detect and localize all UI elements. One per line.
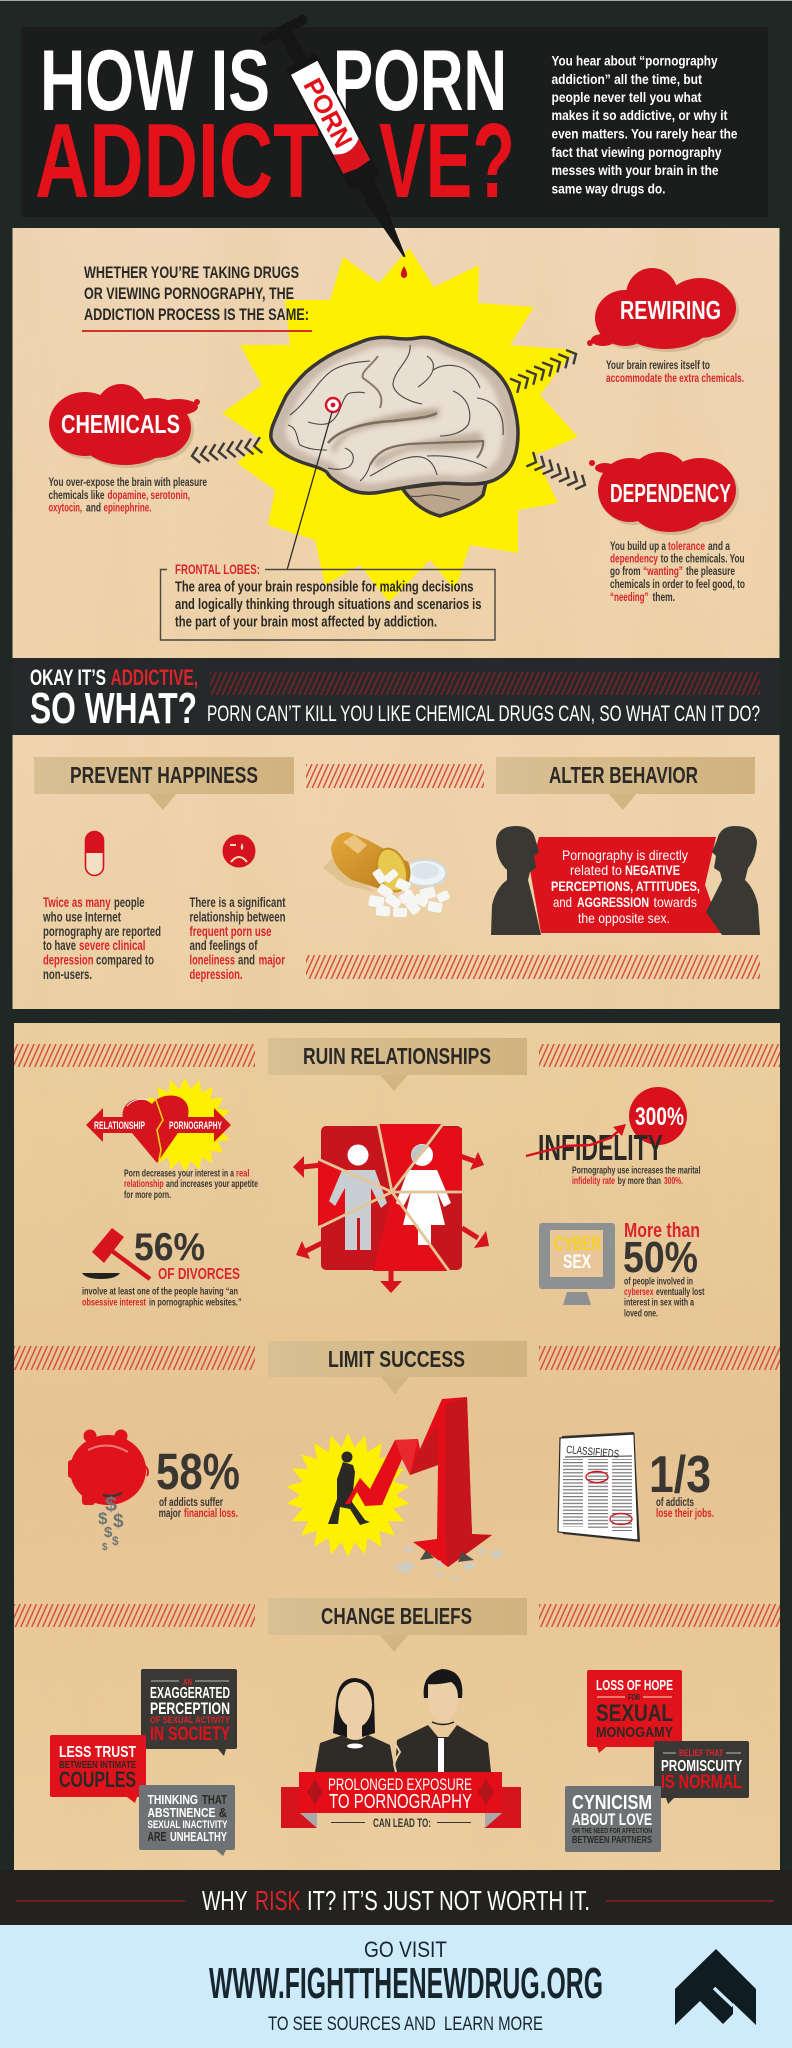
callout: frontal lobes — [160, 561, 495, 640]
dollar signs: $ — [112, 1534, 119, 1548]
text: loneliness stat — [190, 895, 286, 982]
heading: change beliefs — [268, 1598, 527, 1652]
heading: prevent happiness — [34, 757, 294, 810]
intro text: even matters. You rarely hear the — [552, 126, 738, 142]
ribbon: prolonged exposure: PROLONGED EXPOSURE — [328, 1775, 472, 1794]
blood drop — [401, 266, 407, 278]
stat: infidelity: INFIDELITY — [538, 1127, 663, 1168]
dollar signs — [98, 1494, 124, 1553]
banner text: NEGATIVE — [625, 862, 680, 878]
man — [395, 1669, 491, 1772]
target marker — [326, 398, 340, 412]
icon: piggy bank — [68, 1430, 148, 1553]
stat: infidelity — [526, 1087, 701, 1187]
bubble: abstinence unhealthy: SEXUAL INACTIVITY — [148, 1819, 228, 1831]
stat: 56 percent — [82, 1226, 242, 1308]
bubble: loss of hope: MONOGAMY — [596, 1724, 673, 1741]
dependency text: tolerance — [668, 541, 705, 553]
text: real relationship: real — [236, 1168, 250, 1180]
icon: monitor: SEX — [563, 1252, 591, 1273]
intro text: makes it so addictive, or why it — [552, 107, 728, 123]
dependency text: to the chemicals. You — [661, 554, 745, 566]
chemicals text: chemicals like — [48, 490, 104, 502]
heading: change beliefs: CHANGE BELIEFS — [321, 1603, 472, 1629]
heading: alter behavior: ALTER BEHAVIOR — [549, 762, 698, 788]
stat: 56 percent: involve at least one of the people having “an — [82, 1286, 238, 1298]
yellow burst — [222, 248, 578, 602]
cloud: rewiring: REWIRING — [620, 295, 721, 325]
heading: same process: ADDICTION PROCESS IS THE SAME: — [84, 305, 309, 324]
text: depression stat: people — [114, 895, 145, 910]
bubble: loss of hope: SEXUAL — [596, 1700, 673, 1727]
bubble: loss of hope — [587, 1670, 682, 1753]
icon: monitor — [539, 1223, 615, 1305]
bubble: abstinence unhealthy: THAT — [202, 1792, 227, 1807]
text: loneliness stat: relationship between — [190, 910, 286, 924]
callout: frontal lobes: and logically thinking through situations and scenarios is — [175, 597, 482, 613]
go visit: GO VISIT — [364, 1937, 447, 1962]
graphic: falling chart and businessman — [280, 1397, 504, 1581]
ribbon: prolonged exposure — [281, 1772, 521, 1830]
arrow: to rewiring — [510, 347, 580, 393]
callout: frontal lobes: FRONTAL LOBES: — [175, 561, 260, 577]
stat: cybersex: of people involved in — [624, 1276, 693, 1288]
banner text: AGGRESSION — [577, 894, 649, 910]
stat: cybersex — [623, 1220, 705, 1320]
stat: 56 percent: OF DIVORCES — [158, 1266, 240, 1283]
text: depression stat: depression — [43, 952, 94, 968]
callout: frontal lobes: The area of your brain responsible for making decisions — [175, 580, 474, 596]
figure: woman — [396, 1144, 451, 1245]
bubble: cynicism: CYNICISM — [572, 1792, 652, 1814]
panel: relationships, success, beliefs — [14, 1023, 780, 1870]
heading: same process: OR VIEWING PORNOGRAPHY, THE — [84, 284, 294, 303]
rubble — [394, 1546, 504, 1581]
dependency text: go from — [610, 566, 640, 578]
heading: alter behavior — [496, 757, 755, 810]
stat: cybersex: cybersex — [624, 1286, 654, 1298]
icon: heart and arrows: RELATIONSHIP — [94, 1120, 145, 1132]
brain illustration — [271, 337, 518, 516]
bubble: loss of hope: LOSS OF HOPE — [596, 1678, 673, 1694]
bubble: cynicism: ABOUT LOVE — [572, 1810, 652, 1829]
cloud: chemicals: CHEMICALS — [61, 409, 180, 439]
text: depression stat: pornography are reported — [43, 924, 161, 939]
syringe label: PORN — [297, 73, 359, 153]
portraits: couple — [315, 1669, 491, 1772]
pointer line — [287, 412, 332, 570]
cloud: dependency — [589, 452, 739, 535]
dependency text: You build up a — [610, 541, 666, 553]
stat: infidelity: infidelity rate — [572, 1175, 615, 1187]
stat: one third: 1/3 — [649, 1446, 711, 1504]
bubble: exaggerated perception — [141, 1669, 237, 1756]
band heading: OKAY IT’S — [30, 665, 106, 690]
heading: ruin relationships: RUIN RELATIONSHIPS — [303, 1043, 491, 1069]
dependency text: the pleasure — [686, 566, 735, 578]
syringe — [259, 13, 428, 269]
bubble: abstinence unhealthy: THINKING — [148, 1792, 198, 1807]
banner text: towards — [654, 894, 697, 910]
title: VE? — [379, 102, 515, 220]
heading: same process: WHETHER YOU’RE TAKING DRUGS — [84, 263, 299, 282]
ribbon: prolonged exposure: TO PORNOGRAPHY — [329, 1791, 472, 1813]
intro text: people never tell you what — [552, 89, 702, 105]
intro text: You hear about “pornography — [552, 52, 718, 68]
bubble: promiscuity: PROMISCUITY — [661, 1758, 742, 1775]
heading: ruin relationships — [268, 1038, 527, 1091]
text: loneliness stat: depression. — [190, 967, 242, 982]
stat: 56 percent: in pornographic websites.” — [149, 1296, 242, 1308]
closing line: IT? IT’S JUST NOT WORTH IT. — [307, 1885, 590, 1916]
dependency text: them. — [652, 592, 675, 604]
icon: logo — [675, 1949, 756, 2025]
bubble: abstinence unhealthy: ARE — [148, 1829, 167, 1844]
bubble: cynicism: BETWEEN PARTNERS — [572, 1835, 652, 1846]
heading: limit success — [268, 1341, 527, 1394]
arrow: to chemicals — [191, 437, 262, 464]
bubble: cynicism: OR THE NEED FOR AFFECTION — [572, 1828, 652, 1835]
text: real relationship: for more porn. — [124, 1189, 171, 1201]
sources note: TO SEE SOURCES AND LEARN MORE — [268, 2014, 543, 2035]
title: ADDICT — [35, 102, 319, 220]
businessman — [328, 1452, 370, 1525]
bubble: exaggerated perception: PERCEPTION — [150, 1699, 230, 1718]
footer — [0, 1925, 792, 2048]
banner text: the opposite sex. — [578, 910, 670, 926]
closing line: WHY — [202, 1885, 248, 1916]
text: real relationship: Porn decreases your interest in a — [124, 1168, 234, 1180]
icon: heart and arrows: PORNOGRAPHY — [169, 1120, 222, 1132]
can lead to — [331, 1816, 471, 1830]
bubble: less trust: BETWEEN INTIMATE — [59, 1760, 136, 1771]
bubble: loss of hope: FOR — [628, 1692, 640, 1702]
bubble: less trust — [50, 1735, 146, 1803]
cloud: rewiring — [587, 268, 739, 352]
dollar signs: $ — [105, 1494, 117, 1516]
dollar signs: $ — [98, 1509, 108, 1528]
stat: infidelity: 300% — [635, 1103, 684, 1131]
stat: infidelity: 300%. — [664, 1175, 683, 1187]
cloud: dependency: DEPENDENCY — [610, 478, 731, 508]
text: depression stat: to have — [43, 938, 76, 953]
silhouette: right — [706, 826, 760, 935]
figure: man — [329, 1144, 387, 1250]
text: loneliness stat: major — [259, 952, 286, 968]
stat: infidelity: by more than — [618, 1175, 661, 1187]
bubble: exaggerated perception: AN — [183, 1677, 192, 1687]
chemicals text — [48, 477, 207, 514]
bubble: abstinence unhealthy — [139, 1785, 235, 1856]
heading: prevent happiness: PREVENT HAPPINESS — [70, 762, 258, 788]
pill bottle — [323, 832, 451, 917]
bubble: exaggerated perception: IN SOCIETY — [150, 1724, 230, 1745]
silhouette: left — [491, 826, 541, 935]
bubble: abstinence unhealthy: ABSTINENCE — [148, 1805, 216, 1820]
bubble: promiscuity: IS NORMAL — [661, 1772, 742, 1793]
band heading: SO WHAT? — [30, 684, 197, 733]
outward arrows — [293, 1152, 489, 1293]
rewiring text: accommodate the extra chemicals. — [606, 373, 744, 385]
dependency text: “needing” — [610, 592, 648, 604]
text: real relationship — [124, 1168, 258, 1201]
header panel — [21, 27, 768, 220]
stat: 56 percent: 56% — [134, 1226, 205, 1269]
stat: one third: of addicts — [656, 1497, 694, 1509]
dependency text: chemicals in order to feel good, to — [610, 579, 745, 591]
stat: 58 percent: financial loss. — [184, 1508, 238, 1520]
heading: same process — [82, 263, 312, 332]
banner text: related to — [570, 862, 622, 878]
text: real relationship: relationship — [124, 1178, 164, 1190]
text: depression stat: non-users. — [43, 967, 92, 982]
bubble: abstinence unhealthy: UNHEALTHY — [170, 1829, 227, 1844]
stat: cybersex: loved one. — [624, 1308, 658, 1320]
text: real relationship: and increases your appetite — [166, 1178, 258, 1190]
bubble: less trust: COUPLES — [59, 1767, 136, 1792]
text: loneliness stat: frequent porn use — [190, 924, 272, 939]
stat: cybersex: More than — [624, 1220, 700, 1242]
title: PORN — [333, 33, 507, 129]
text: loneliness stat: loneliness — [190, 952, 235, 968]
chemicals text: and — [86, 502, 101, 514]
title: HOW IS — [40, 33, 270, 129]
heading: limit success: LIMIT SUCCESS — [328, 1346, 465, 1372]
bubble: abstinence unhealthy: & — [219, 1805, 227, 1820]
chemicals text: dopamine, serotonin, — [108, 490, 190, 502]
text: depression stat: severe clinical — [79, 938, 146, 953]
text: loneliness stat: There is a significant — [190, 895, 286, 910]
text: depression stat: who use Internet — [42, 910, 121, 924]
graphic: broken couple — [293, 1124, 489, 1293]
bubble: promiscuity: BELIEF THAT — [679, 1748, 723, 1758]
icon: pill — [86, 832, 104, 876]
band: so what — [12, 658, 780, 735]
stat: 56 percent: obsessive interest — [82, 1296, 146, 1308]
stat: cybersex: eventually lost — [656, 1286, 705, 1298]
arrow: to dependency — [526, 452, 588, 492]
text: loneliness stat: and feelings of — [190, 938, 258, 953]
can lead to: CAN LEAD TO: — [373, 1816, 431, 1830]
intro text: same way drugs do. — [552, 180, 666, 196]
intro text: fact that viewing pornography — [552, 144, 722, 160]
stat: one third: lose their jobs. — [656, 1508, 714, 1520]
intro text: addiction” all the time, but — [552, 71, 702, 87]
closing line: RISK — [255, 1885, 301, 1916]
dollar signs: $ — [102, 1542, 108, 1553]
stat: 58 percent: 58% — [156, 1443, 240, 1500]
text: loneliness stat: and — [238, 952, 255, 968]
woman — [315, 1678, 395, 1772]
intro text: messes with your brain in the — [552, 162, 719, 178]
hatch strips — [14, 1044, 780, 1627]
stat: cybersex: 50% — [623, 1233, 698, 1282]
callout: frontal lobes: the part of your brain most affected by addiction. — [175, 614, 437, 630]
rewiring text — [606, 360, 744, 385]
chemicals text: epinephrine. — [104, 502, 152, 514]
band: why risk it — [0, 1870, 792, 1925]
dependency text: “wanting” — [643, 566, 683, 578]
chemicals text: oxytocin, — [48, 502, 82, 514]
icon: gavel — [82, 1228, 150, 1279]
intro text — [552, 52, 738, 196]
icon: newspaper — [558, 1432, 640, 1542]
dollar signs: $ — [104, 1524, 113, 1541]
closing line — [202, 1885, 590, 1916]
arrow: chart — [345, 1397, 492, 1567]
text: depression stat — [42, 895, 161, 982]
chemicals text: You over-expose the brain with pleasure — [48, 477, 207, 489]
text: depression stat: compared to — [96, 952, 154, 968]
bubble: exaggerated perception: EXAGGERATED — [150, 1685, 230, 1702]
title — [35, 33, 515, 220]
banner text: and — [553, 894, 572, 910]
banner text: PERCEPTIONS, ATTITUDES, — [551, 878, 700, 894]
icon: newspaper: CLASSIFIEDS — [566, 1444, 620, 1461]
stat: infidelity: Pornography use increases the marital — [572, 1164, 701, 1176]
band heading: ADDICTIVE, — [111, 665, 198, 690]
bubble: cynicism — [565, 1786, 661, 1852]
banner: negative perceptions — [491, 826, 760, 935]
dependency text — [610, 541, 745, 604]
bubble: promiscuity — [654, 1741, 749, 1804]
band heading — [30, 665, 198, 733]
panel: addiction process — [12, 228, 780, 658]
dependency text: and a — [708, 541, 730, 553]
dependency text: dependency — [610, 554, 658, 566]
rewiring text: Your brain rewires itself to — [606, 360, 710, 372]
cloud: chemicals — [49, 384, 200, 468]
panel: happiness and behavior — [12, 735, 780, 1009]
stat: 58 percent — [156, 1443, 240, 1520]
dollar signs: $ — [113, 1511, 124, 1532]
hatch strip — [210, 672, 760, 695]
bubble: less trust: LESS TRUST — [59, 1744, 136, 1761]
banner text: Pornography is directly — [562, 847, 688, 863]
bubble: exaggerated perception: OF SEXUAL ACTIVITY — [150, 1715, 230, 1725]
icon: heart and arrows — [86, 1073, 237, 1177]
stat: cybersex: interest in sex with a — [624, 1296, 694, 1308]
text: depression stat: Twice as many — [43, 895, 111, 910]
banner text — [551, 847, 700, 926]
icon: sad face — [222, 834, 256, 868]
stat: 58 percent: major — [159, 1508, 181, 1520]
stat: 58 percent: of addicts suffer — [159, 1497, 223, 1509]
icon: monitor: CYBER — [554, 1234, 601, 1255]
